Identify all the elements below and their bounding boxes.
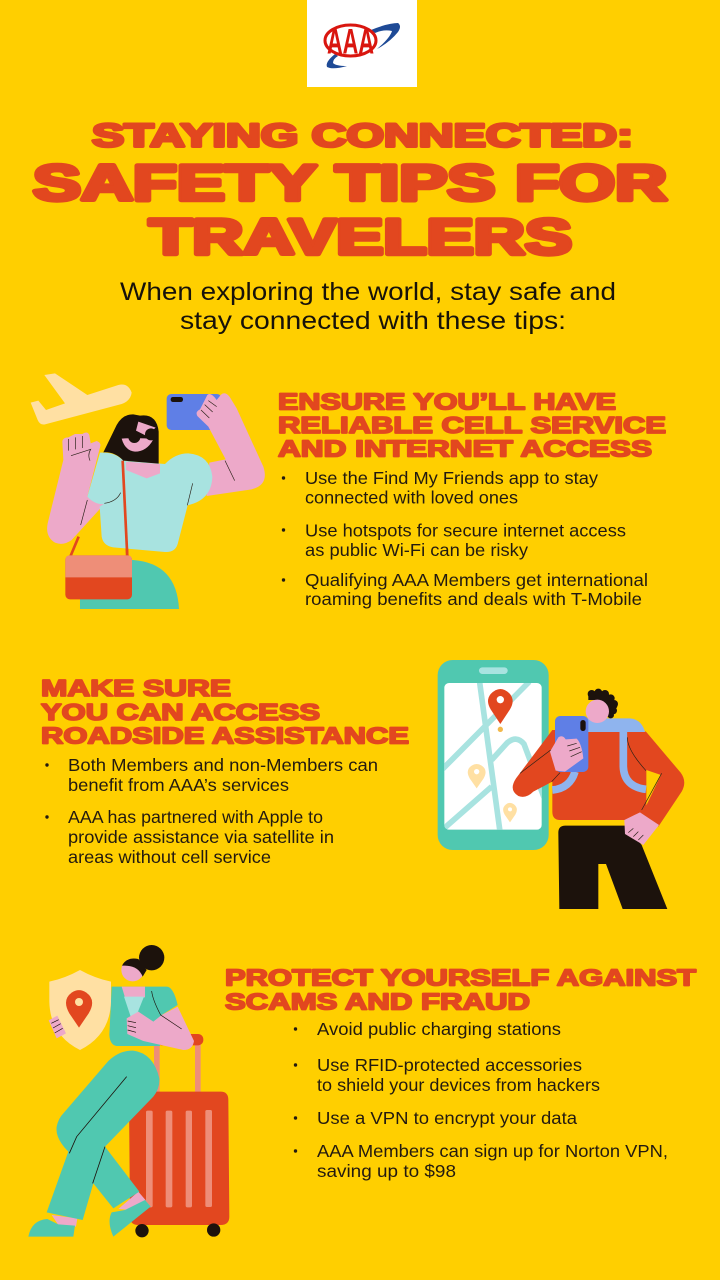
bullet list: provide assistance via satellite in: [68, 827, 334, 847]
heading: [41, 675, 409, 748]
bullet list: roaming benefits and deals with T-Mobile: [305, 589, 642, 609]
heading: MAKE SURE: [41, 675, 231, 701]
heading: RELIABLE CELL SERVICE: [278, 412, 666, 438]
title: SAFETY TIPS FOR: [33, 155, 667, 211]
panel: scams and fraud tips: [225, 964, 697, 1181]
illustration: woman taking selfie with plane: [31, 373, 265, 609]
bullet list: Avoid public charging stations: [317, 1019, 561, 1039]
intro text: When exploring the world, stay safe and: [120, 278, 616, 306]
arm: [127, 1007, 194, 1050]
suitcase: [129, 1092, 229, 1225]
face: [122, 422, 156, 452]
icon: airplane: [31, 373, 132, 424]
bullet list: AAA Members can sign up for Norton VPN,: [317, 1141, 668, 1161]
socks: [52, 1192, 146, 1227]
bullet list: [294, 1019, 668, 1181]
phone in hand: [555, 716, 588, 772]
bag: [65, 555, 132, 599]
illustration: woman on suitcase with shield: [28, 945, 229, 1237]
jacket: [513, 730, 684, 827]
bullet list: as public Wi-Fi can be risky: [305, 540, 528, 560]
big phone: [438, 660, 549, 850]
intro text: [120, 278, 616, 335]
strap over shirt: [123, 461, 127, 557]
bullet list: [45, 755, 378, 867]
bullet list: saving up to $98: [317, 1161, 456, 1181]
head: [121, 959, 144, 981]
trousers: [558, 826, 667, 909]
sunglasses: [128, 428, 157, 443]
bullet list: Use the Find My Friends app to stay: [305, 468, 598, 488]
bullet list: Qualifying AAA Members get international: [305, 570, 648, 590]
skirt: [80, 560, 179, 609]
bullet list: Both Members and non-Members can: [68, 755, 378, 775]
neck: [126, 462, 160, 478]
bullet list: to shield your devices from hackers: [317, 1075, 600, 1095]
icon: shield with pin: [49, 970, 111, 1050]
suitcase handle: [154, 1042, 160, 1093]
map pins pale: [468, 764, 517, 822]
heading: YOU CAN ACCESS: [41, 699, 320, 725]
heading: PROTECT YOURSELF AGAINST: [225, 964, 697, 990]
bullet list: Use a VPN to encrypt your data: [317, 1108, 577, 1128]
title: [33, 118, 667, 265]
bullet list: benefit from AAA’s services: [68, 775, 289, 795]
logo: AAA: AAA: [327, 22, 374, 62]
shoes: [28, 1200, 151, 1237]
head: [586, 700, 609, 723]
heading: ENSURE YOU’LL HAVE: [278, 388, 616, 414]
intro text: stay connected with these tips:: [180, 307, 566, 335]
bullet list: AAA has partnered with Apple to: [68, 807, 323, 827]
panel: cell service tips: [278, 388, 666, 609]
title: TRAVELERS: [149, 209, 572, 265]
right arm: [197, 393, 265, 496]
left arm: [47, 433, 105, 544]
hair: [103, 414, 159, 464]
heading: [278, 388, 666, 462]
heading: ROADSIDE ASSISTANCE: [41, 722, 409, 748]
map screen: [444, 683, 542, 830]
title: STAYING CONNECTED:: [92, 118, 633, 154]
trousers: [47, 1051, 159, 1220]
bullet list: Use RFID-protected accessories: [317, 1055, 582, 1075]
logo: AAA: [307, 0, 417, 87]
bullet list: Use hotspots for secure internet access: [305, 520, 626, 540]
heading: SCAMS AND FRAUD: [225, 988, 530, 1014]
heading: AND INTERNET ACCESS: [278, 436, 652, 462]
phone: [167, 394, 222, 430]
hair: [588, 689, 618, 718]
map pin red: [488, 689, 513, 724]
illustration: man with phone and map: [438, 660, 684, 909]
backpack straps: [587, 718, 645, 732]
bullet list: [282, 468, 648, 609]
hand on shield: [49, 1016, 66, 1038]
torso: [109, 987, 178, 1046]
hands: [550, 736, 659, 845]
shirt: [87, 453, 212, 552]
bag strap: [70, 460, 127, 557]
heading: [225, 964, 697, 1014]
panel: roadside assistance tips: [41, 675, 409, 867]
bullet list: connected with loved ones: [305, 488, 518, 508]
bullet list: areas without cell service: [68, 847, 271, 867]
